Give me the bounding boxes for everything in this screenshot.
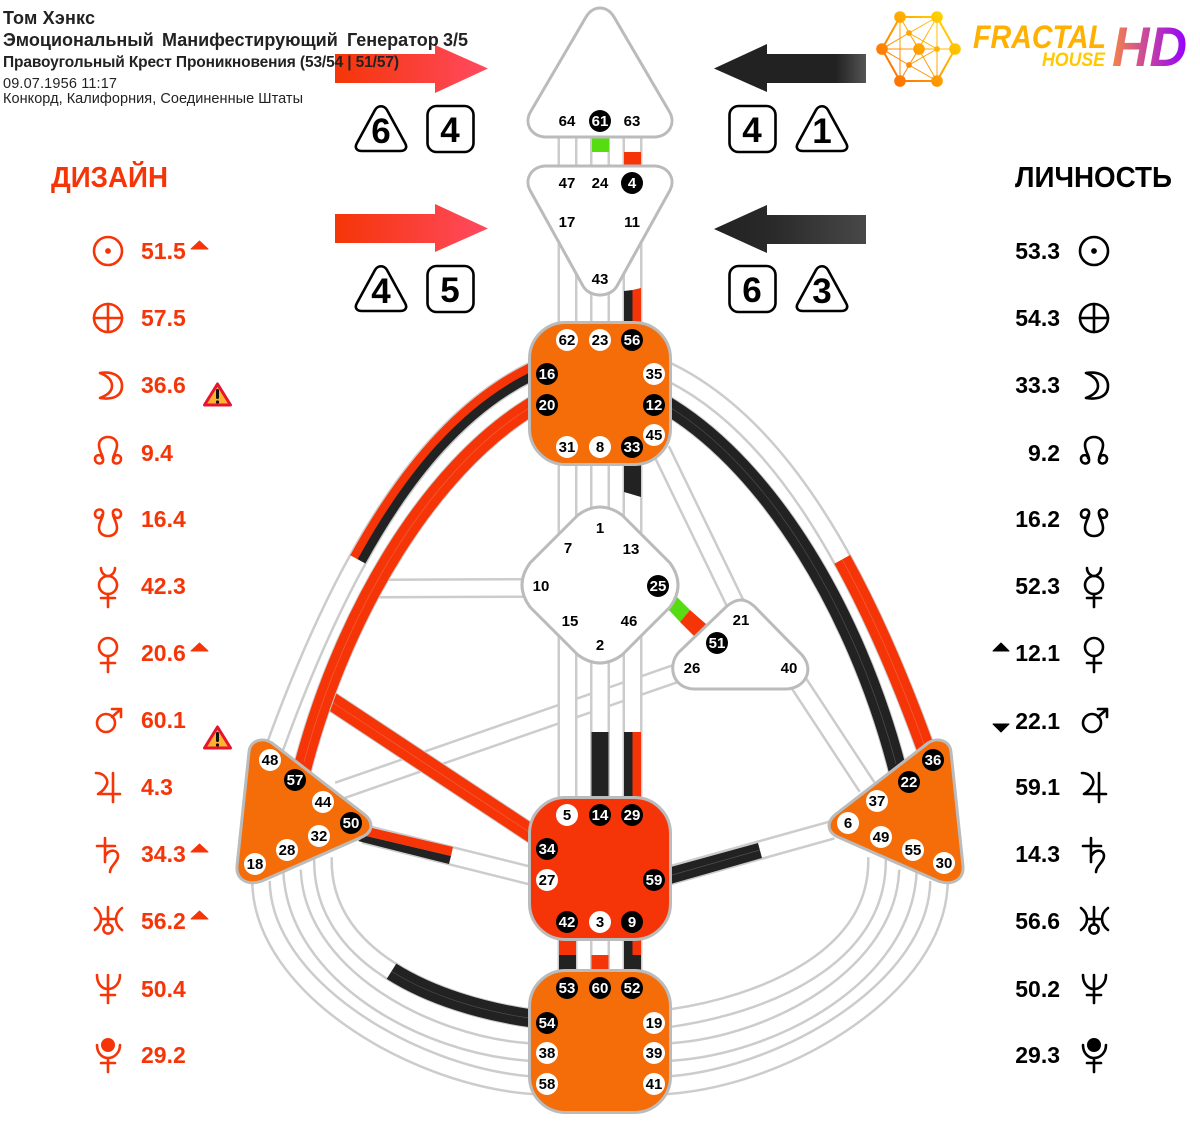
heading: personality: ЛИЧНОСТЬ bbox=[1015, 162, 1172, 194]
badge: triangle 3: 3 bbox=[812, 272, 832, 311]
channel 39-55 bbox=[655, 870, 908, 1053]
column: design planets bbox=[94, 237, 230, 1072]
venus 20.6 bbox=[99, 638, 208, 672]
fill: 61-24 bbox=[592, 137, 609, 152]
badge: square 4 bbox=[428, 106, 474, 152]
center: throat bbox=[530, 322, 670, 464]
jupiter 4.3 bbox=[96, 773, 173, 802]
badge: triangle 1 bbox=[797, 106, 847, 151]
center: throat: 23 bbox=[592, 332, 608, 349]
fill: 46-29 bbox=[624, 732, 641, 799]
birth date: 09.07.1956 11:17 bbox=[3, 76, 117, 92]
mercury 42.3: 42.3 bbox=[141, 573, 186, 599]
logo: HOUSE bbox=[1042, 50, 1106, 71]
pluto 29.2: 29.2 bbox=[141, 1042, 186, 1068]
center: ajna bbox=[528, 166, 672, 295]
channel 54-32 bbox=[323, 857, 545, 1020]
mercury 42.3 bbox=[99, 568, 186, 607]
center: root: 41 bbox=[646, 1076, 662, 1093]
channel 34-57 bbox=[322, 695, 540, 839]
channel 25-51 bbox=[667, 597, 706, 637]
venus 12.1: 12.1 bbox=[1015, 640, 1060, 666]
saturn 14.3 bbox=[1015, 838, 1104, 872]
center: g: 10 bbox=[533, 578, 549, 595]
saturn 14.3: 14.3 bbox=[1015, 841, 1060, 867]
saturn 34.3 bbox=[97, 838, 208, 872]
mars 22.1 bbox=[993, 708, 1107, 734]
center: ego bbox=[673, 600, 808, 689]
neptune 50.4 bbox=[97, 975, 186, 1003]
arrow: personality bottom bbox=[714, 205, 866, 253]
center: ego: 51 bbox=[709, 635, 725, 652]
mercury 52.3 bbox=[1015, 568, 1103, 607]
fill: 9-52 bbox=[624, 939, 641, 971]
center: spleen: 18 bbox=[247, 856, 263, 873]
center: spleen: 48 bbox=[262, 752, 278, 769]
uranus 56.2 bbox=[95, 907, 208, 934]
jupiter 4.3: 4.3 bbox=[141, 774, 173, 800]
earth 54.3: 54.3 bbox=[1015, 305, 1060, 331]
badge: square 4 right bbox=[730, 106, 776, 152]
center: ego: 26 bbox=[684, 660, 700, 677]
center: spleen bbox=[237, 740, 371, 883]
neptune 50.2: 50.2 bbox=[1015, 976, 1060, 1002]
venus 12.1 bbox=[993, 638, 1103, 672]
moon 36.6 bbox=[100, 372, 186, 398]
center: root: 58 bbox=[539, 1076, 555, 1093]
center: spleen: 44 bbox=[315, 794, 332, 811]
sun 51.5: 51.5 bbox=[141, 238, 186, 264]
center: g bbox=[522, 507, 678, 663]
center: g: 7 bbox=[564, 540, 572, 557]
type and profile: Эмоциональный bbox=[3, 30, 154, 50]
center: sacral: 14 bbox=[592, 807, 609, 824]
channel 27-50 bbox=[358, 828, 540, 878]
badge: triangle 4 bbox=[356, 266, 406, 311]
badge: square 6 bbox=[730, 266, 776, 312]
center: spleen: 50 bbox=[343, 815, 359, 832]
center: throat: 45 bbox=[646, 427, 662, 444]
fill: 11-56 bbox=[624, 288, 641, 324]
channel 37-40 bbox=[798, 682, 867, 787]
birth place: Конкорд, Калифорния, Соединенные Штаты bbox=[3, 91, 303, 107]
center: throat: 35 bbox=[646, 366, 662, 383]
moon 33.3: 33.3 bbox=[1015, 372, 1060, 398]
type and profile: Манифестирующий bbox=[162, 30, 338, 50]
center: root: 54 bbox=[539, 1015, 556, 1032]
center: root: 19 bbox=[646, 1015, 662, 1032]
center: sacral: 5 bbox=[563, 807, 571, 824]
pluto 29.3: 29.3 bbox=[1015, 1042, 1060, 1068]
uranus 56.6: 56.6 bbox=[1015, 908, 1060, 934]
heading: design: ДИЗАЙН bbox=[51, 160, 168, 194]
center: solar plexus: 55 bbox=[905, 842, 921, 859]
badge: triangle 6 bbox=[356, 106, 406, 151]
pluto 29.2 bbox=[97, 1038, 186, 1072]
moon 36.6: 36.6 bbox=[141, 372, 186, 398]
center: throat: 8 bbox=[596, 439, 604, 456]
center: sacral: 9 bbox=[628, 914, 636, 931]
column: personality planets bbox=[993, 237, 1108, 1072]
center: head: 64 bbox=[559, 113, 576, 130]
north node 9.2 bbox=[1028, 437, 1107, 466]
center: root: 38 bbox=[539, 1045, 555, 1062]
channel 58-18 bbox=[261, 881, 545, 1086]
sun 53.3 bbox=[1015, 237, 1108, 265]
channel 45-21 bbox=[661, 450, 736, 605]
center: ajna: 17 bbox=[559, 214, 575, 231]
center: ajna: 43 bbox=[592, 271, 608, 288]
south node 16.2: 16.2 bbox=[1015, 506, 1060, 532]
center: g: 1 bbox=[596, 520, 604, 537]
incarnation cross: Правоугольный Крест Проникновения (53/54 | 51/57) bbox=[3, 54, 399, 71]
logo bbox=[876, 11, 1187, 87]
badge: triangle 3 bbox=[797, 266, 847, 311]
center: throat: 56 bbox=[624, 332, 640, 349]
center: g: 15 bbox=[562, 613, 578, 630]
arrow: design top bbox=[335, 45, 488, 93]
fill: 42-53 bbox=[559, 939, 576, 971]
center: sacral: 42 bbox=[559, 914, 575, 931]
logo wordmark: FRACTAL bbox=[973, 19, 1106, 55]
center: head: 61 bbox=[592, 113, 608, 130]
badge: square 4: 4 bbox=[440, 111, 460, 150]
center: sacral: 3 bbox=[596, 914, 604, 931]
center: throat: 31 bbox=[559, 439, 575, 456]
channel 10-57 bbox=[370, 578, 525, 598]
center: throat: 33 bbox=[624, 439, 640, 456]
center: g: 13 bbox=[623, 541, 639, 558]
channel 59-6 bbox=[660, 830, 832, 887]
chart: channels bbox=[261, 135, 939, 1086]
south node 16.2 bbox=[1015, 506, 1107, 536]
mars 22.1: 22.1 bbox=[1015, 708, 1060, 734]
logo icon: network bbox=[876, 11, 961, 87]
channel 35-36 bbox=[655, 365, 930, 760]
saturn 34.3: 34.3 bbox=[141, 841, 186, 867]
sun 53.3: 53.3 bbox=[1015, 238, 1060, 264]
jupiter 59.1: 59.1 bbox=[1015, 774, 1060, 800]
mars 60.1 bbox=[97, 707, 186, 733]
channel 19-49 bbox=[655, 857, 877, 1020]
north node 9.4 bbox=[95, 437, 173, 466]
name: Том Хэнкс bbox=[3, 8, 95, 28]
center: solar plexus: 6 bbox=[844, 815, 852, 832]
center: solar plexus: 36 bbox=[925, 752, 941, 769]
uranus 56.2: 56.2 bbox=[141, 908, 186, 934]
badge: square 4 right: 4 bbox=[742, 111, 762, 150]
moon 33.3 bbox=[1015, 372, 1108, 398]
center: solar plexus: 22 bbox=[901, 774, 917, 791]
mercury 52.3: 52.3 bbox=[1015, 573, 1060, 599]
center: sacral: 29 bbox=[624, 807, 640, 824]
north node 9.2: 9.2 bbox=[1028, 440, 1060, 466]
center: ego: 21 bbox=[733, 612, 749, 629]
center: spleen: 32 bbox=[311, 828, 327, 845]
center: throat: 12 bbox=[646, 397, 662, 414]
center: root bbox=[530, 970, 670, 1112]
sun 51.5 bbox=[94, 237, 208, 265]
north node 9.4: 9.4 bbox=[141, 440, 173, 466]
center: g: 2 bbox=[596, 637, 604, 654]
earth 57.5 bbox=[94, 304, 186, 332]
mars 60.1: 60.1 bbox=[141, 707, 186, 733]
pluto 29.3 bbox=[1015, 1038, 1106, 1072]
type and profile: Генератор bbox=[347, 30, 439, 50]
fill: 2-14 bbox=[592, 732, 608, 799]
center: ajna: 11 bbox=[624, 214, 640, 231]
center: ajna: 24 bbox=[592, 175, 609, 192]
neptune 50.4: 50.4 bbox=[141, 976, 186, 1002]
channel 38-28 bbox=[292, 870, 545, 1053]
vertical channels bbox=[559, 135, 641, 972]
earth 54.3 bbox=[1015, 304, 1108, 332]
center: throat: 20 bbox=[539, 397, 555, 414]
earth 57.5: 57.5 bbox=[141, 305, 186, 331]
center: head bbox=[528, 8, 672, 137]
fill: 4-63 bbox=[624, 152, 641, 166]
center: sacral: 34 bbox=[539, 841, 556, 858]
channel 20-57 bbox=[300, 398, 545, 778]
center: solar plexus: 37 bbox=[869, 793, 885, 810]
fill: 3-60 bbox=[592, 955, 608, 971]
warning: moon bbox=[204, 384, 230, 405]
center: throat: 16 bbox=[539, 366, 555, 383]
badge: triangle 6: 6 bbox=[371, 112, 391, 151]
center: sacral: 27 bbox=[539, 872, 555, 889]
badge: triangle 1: 1 bbox=[812, 112, 832, 151]
logo: HD bbox=[1112, 15, 1187, 78]
center: g: 25 bbox=[650, 578, 666, 595]
center: ajna: 4 bbox=[628, 175, 637, 192]
badge: triangle 4: 4 bbox=[371, 272, 391, 311]
channel 41-30 bbox=[655, 881, 939, 1086]
center: solar plexus bbox=[829, 740, 963, 883]
center: sacral bbox=[530, 798, 670, 940]
center: ajna: 47 bbox=[559, 175, 575, 192]
center: root: 53 bbox=[559, 980, 575, 997]
arrow: design bottom bbox=[335, 204, 488, 252]
south node 16.4: 16.4 bbox=[141, 506, 186, 532]
warning: mars bbox=[204, 727, 230, 748]
uranus 56.6 bbox=[1015, 907, 1108, 934]
center: head: 63 bbox=[624, 113, 640, 130]
neptune 50.2 bbox=[1015, 975, 1106, 1003]
badge: square 5 bbox=[428, 266, 474, 312]
center: g: 46 bbox=[621, 613, 637, 630]
channel 16-48 bbox=[270, 362, 545, 760]
channel 26-44 bbox=[338, 672, 680, 791]
south node 16.4 bbox=[95, 506, 186, 536]
jupiter 59.1 bbox=[1015, 773, 1106, 802]
fill: 33-13 bbox=[624, 463, 641, 497]
arrow: personality top bbox=[714, 44, 866, 92]
venus 20.6: 20.6 bbox=[141, 640, 186, 666]
center: spleen: 28 bbox=[279, 842, 295, 859]
header text bbox=[3, 8, 468, 107]
type and profile: 3/5 bbox=[443, 30, 468, 50]
center: spleen: 57 bbox=[287, 772, 303, 789]
center: ego: 40 bbox=[781, 660, 797, 677]
badge: square 6: 6 bbox=[742, 271, 762, 310]
center: root: 60 bbox=[592, 980, 608, 997]
center: sacral: 59 bbox=[646, 872, 662, 889]
center: solar plexus: 30 bbox=[936, 855, 952, 872]
center: throat: 62 bbox=[559, 332, 575, 349]
channel 12-22 bbox=[655, 398, 900, 780]
center: root: 39 bbox=[646, 1045, 662, 1062]
center: root: 52 bbox=[624, 980, 640, 997]
badge: square 5: 5 bbox=[440, 271, 460, 310]
center: solar plexus: 49 bbox=[873, 829, 889, 846]
